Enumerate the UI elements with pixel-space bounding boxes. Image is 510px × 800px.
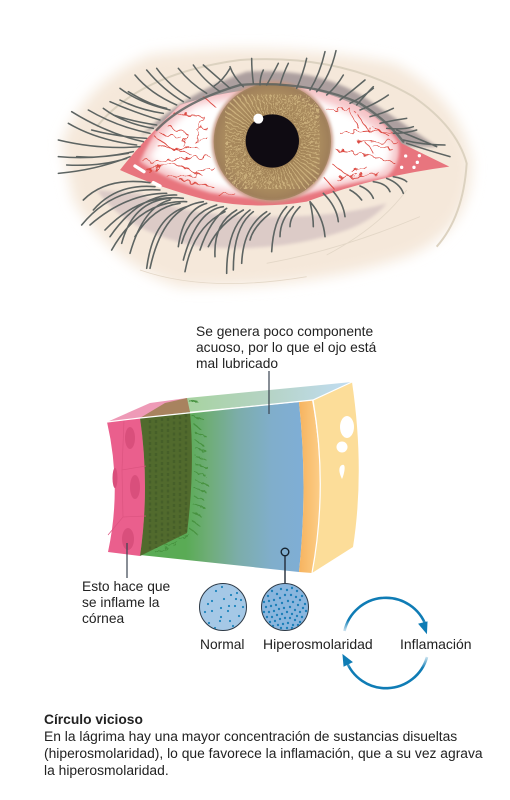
label: poco componente acuoso: Se genera poco componente [196,324,374,339]
upper eyelashes [58,51,450,173]
infographic canvas [44,44,483,778]
label: inflamación: Inflamación [400,636,472,652]
cycle arrow: bottom [343,655,427,688]
mucin texture [150,414,186,550]
top face: fluid [187,382,352,412]
epithelial cell outlines [108,420,146,535]
iris [212,81,333,202]
fluid layer [140,402,304,572]
label: inflamación de la córnea: Esto hace que [82,579,171,594]
eye conjunctiva [120,88,449,205]
lower skin folds [140,190,420,284]
eyelid crease [97,59,467,247]
sclera [140,83,399,198]
white spots [336,416,354,479]
lower lid shadow [97,190,387,248]
label: poco componente acuoso: mal lubricado [196,356,278,371]
lower eyelashes [82,177,407,273]
diagram: tear film cross-section [107,382,359,573]
cycle arrow: top [344,598,427,633]
cell nuclei [112,427,140,550]
pupil [246,114,299,168]
body text: (hiperosmolaridad), lo que favorece la inflamación, que a su vez agrava [44,745,483,761]
pupil highlight [253,114,263,124]
illustration: red irritated eye [58,49,472,287]
top face: mucin [140,398,190,418]
leader line: fluid label [268,371,270,414]
epithelium [107,418,145,556]
skin around the eye [62,49,472,287]
label: hiperosmolaridad: Hiperosmolaridad [263,636,373,652]
circle: high concentration [262,584,308,630]
label: poco componente acuoso: acuoso, por lo que el ojo está [196,340,377,355]
tear duct highlights [135,156,419,186]
top face: pink [107,398,187,422]
yellow layer [312,382,359,573]
white edges [107,382,352,573]
heading: círculo vicioso: Círculo vicioso [44,712,143,727]
leader line: cornea label [126,543,128,578]
orange layer [299,400,320,573]
body text: En la lágrima hay una mayor concentración de sustancias disueltas [44,728,457,744]
marker and leader line to hiperosmolaridad [281,548,289,584]
label: normal: Normal [200,637,244,652]
label: inflamación de la córnea: córnea [82,611,125,626]
label: inflamación de la córnea: se inflame la [82,595,160,610]
circle: normal concentration [200,584,246,630]
mucin layer [140,412,192,556]
mucin hairs [155,400,208,552]
blood vessels [143,97,397,195]
upper lid shadow [140,71,437,147]
body text: la hiperosmolaridad. [44,762,169,778]
